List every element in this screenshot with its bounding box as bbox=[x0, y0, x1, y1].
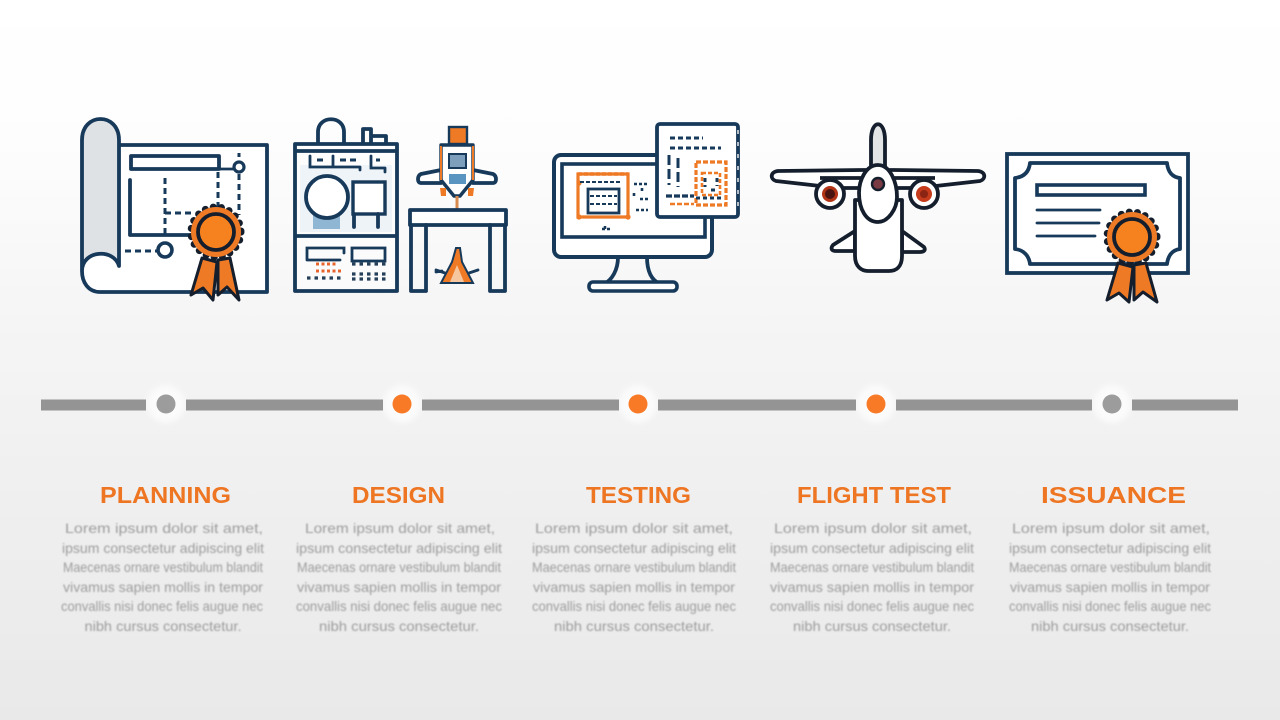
heading: issuance: ISSUANCE bbox=[1041, 482, 1186, 508]
milestone: testing bbox=[628, 394, 648, 414]
body text: issuance: vivamus sapien mollis in tempor bbox=[1010, 579, 1210, 595]
body text: flight test bbox=[770, 520, 974, 634]
heading: flight test: FLIGHT TEST bbox=[797, 482, 951, 508]
body text: design: Lorem ipsum dolor sit amet, bbox=[305, 520, 495, 536]
icon: computer monitor with CAD drawings bbox=[554, 124, 738, 291]
body text: flight test: Lorem ipsum dolor sit amet, bbox=[774, 520, 972, 536]
body text: testing: nibh cursus consectetur. bbox=[554, 618, 714, 634]
body text: testing: vivamus sapien mollis in tempor bbox=[533, 579, 735, 595]
body text: testing bbox=[532, 520, 736, 634]
column: issuance bbox=[1009, 482, 1211, 634]
column: planning bbox=[61, 482, 264, 634]
body text: design: vivamus sapien mollis in tempor bbox=[297, 579, 501, 595]
body text: planning: Lorem ipsum dolor sit amet, bbox=[65, 520, 263, 536]
heading: testing: TESTING bbox=[586, 482, 691, 508]
body text: design: convallis nisi donec felis augue nec bbox=[296, 598, 502, 614]
body text: flight test: ipsum consectetur adipiscing elit bbox=[770, 540, 974, 556]
body text: issuance: nibh cursus consectetur. bbox=[1031, 618, 1189, 634]
body text: issuance: Maecenas ornare vestibulum blandit bbox=[1009, 559, 1211, 575]
milestone: issuance bbox=[1102, 394, 1122, 414]
body text: planning bbox=[61, 520, 264, 634]
milestone: design bbox=[392, 394, 412, 414]
body text: testing: Lorem ipsum dolor sit amet, bbox=[535, 520, 733, 536]
body text: testing: Maecenas ornare vestibulum blandit bbox=[532, 559, 736, 575]
body text: flight test: convallis nisi donec felis augue nec bbox=[770, 598, 974, 614]
body text: issuance: convallis nisi donec felis augue nec bbox=[1009, 598, 1211, 614]
column: flight test bbox=[770, 482, 974, 634]
timeline bbox=[41, 385, 1238, 423]
body text: design: Maecenas ornare vestibulum blandit bbox=[297, 559, 501, 575]
body text: issuance: ipsum consectetur adipiscing elit bbox=[1009, 540, 1211, 556]
milestone: planning bbox=[156, 394, 176, 414]
icon: certificate with rosette bbox=[1007, 154, 1188, 302]
body text: planning: Maecenas ornare vestibulum blandit bbox=[63, 559, 263, 575]
body text: flight test: vivamus sapien mollis in tempor bbox=[770, 579, 974, 595]
body text: testing: ipsum consectetur adipiscing elit bbox=[532, 540, 736, 556]
body text: planning: ipsum consectetur adipiscing elit bbox=[62, 540, 264, 556]
heading: design: DESIGN bbox=[352, 482, 445, 508]
icon: airplane front view bbox=[772, 124, 984, 271]
column: design bbox=[296, 482, 502, 634]
body text: planning: vivamus sapien mollis in tempor bbox=[63, 579, 263, 595]
body text: design: nibh cursus consectetur. bbox=[319, 618, 479, 634]
body text: issuance bbox=[1009, 520, 1211, 634]
body text: planning: convallis nisi donec felis augue nec bbox=[61, 598, 263, 614]
icon: rosette bbox=[1107, 212, 1157, 302]
heading: planning: PLANNING bbox=[100, 482, 231, 508]
body text: design: ipsum consectetur adipiscing elit bbox=[296, 540, 502, 556]
body text: design bbox=[296, 520, 502, 634]
body text: issuance: Lorem ipsum dolor sit amet, bbox=[1012, 520, 1210, 536]
icon: blueprint with rosette bbox=[82, 119, 267, 300]
body text: flight test: nibh cursus consectetur. bbox=[793, 618, 951, 634]
body text: flight test: Maecenas ornare vestibulum blandit bbox=[770, 559, 974, 575]
body text: planning: nibh cursus consectetur. bbox=[84, 618, 242, 634]
milestone: flight test bbox=[866, 394, 886, 414]
icon: rosette bbox=[191, 207, 241, 300]
icon: test rig and rocket on stand bbox=[295, 119, 506, 291]
column: testing bbox=[532, 482, 736, 634]
body text: testing: convallis nisi donec felis augue nec bbox=[532, 598, 736, 614]
